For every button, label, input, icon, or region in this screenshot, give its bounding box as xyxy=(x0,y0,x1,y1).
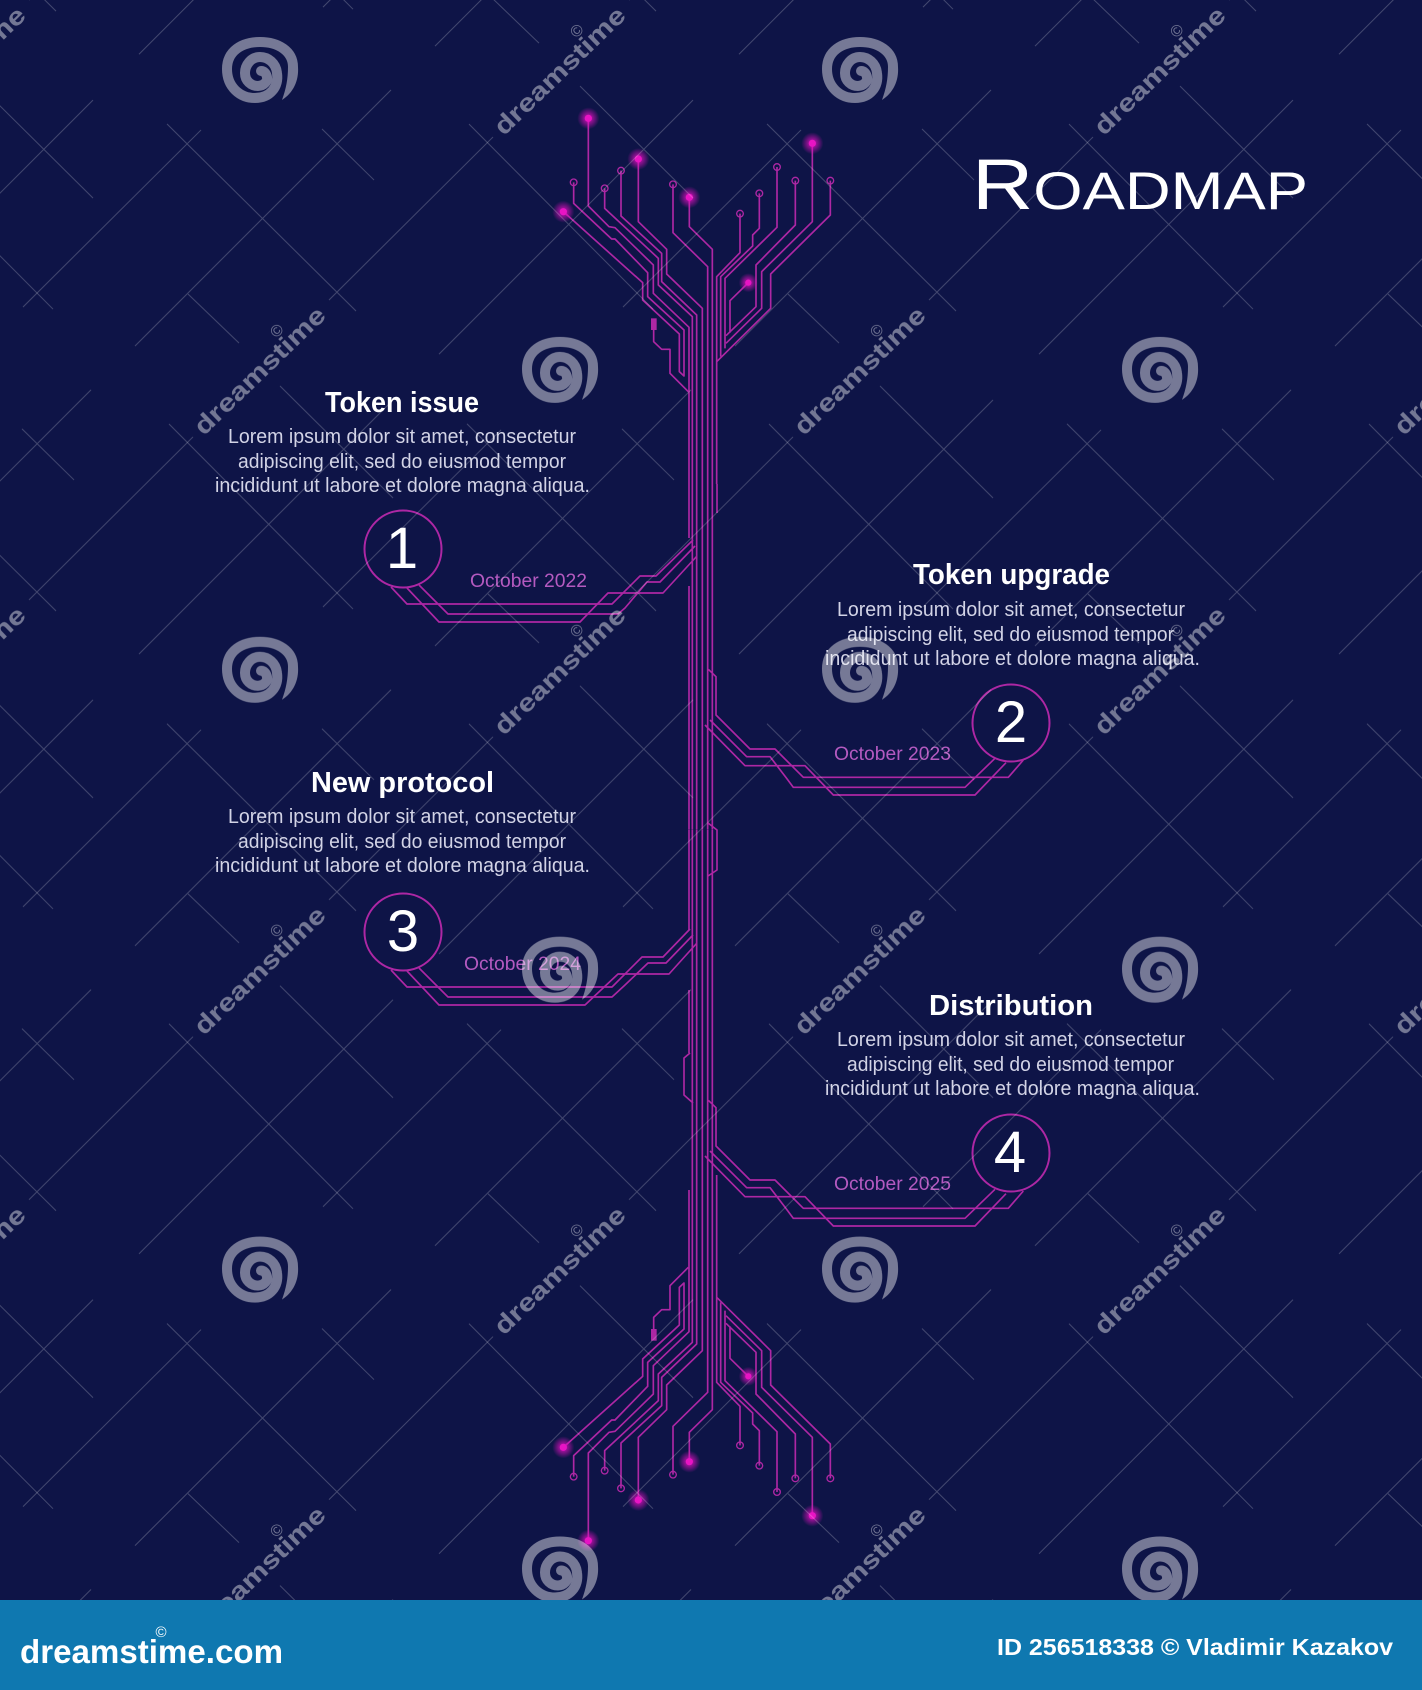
text block: new protocol description xyxy=(215,806,590,877)
panel: distribution xyxy=(825,990,1200,1195)
panel: new protocol xyxy=(215,767,590,975)
date: October 2024: October 2024 xyxy=(464,954,581,975)
heading: new protocol: New protocol xyxy=(311,767,494,799)
text block: token issue description: Lorem ipsum dolor sit amet, consectetur xyxy=(228,426,576,448)
circuit tree crown xyxy=(552,107,834,829)
heading: token issue: Token issue xyxy=(325,387,479,419)
step 3 connector xyxy=(391,929,697,1005)
footer credit: ID 256518338 © Vladimir Kazakov xyxy=(997,1634,1393,1660)
number badge 1: 1 xyxy=(386,516,418,581)
number badge 1 xyxy=(364,510,442,588)
number badge 2 xyxy=(972,684,1050,762)
footer logo text: © xyxy=(155,1624,167,1641)
panel: token issue xyxy=(215,387,590,592)
number badge 4: 4 xyxy=(994,1120,1026,1185)
circuit tree roots xyxy=(552,830,834,1552)
trunk gaps xyxy=(688,538,690,1190)
heading: distribution: Distribution xyxy=(929,990,1093,1022)
number badge 4 xyxy=(972,1114,1050,1192)
number badge 3 xyxy=(364,894,442,970)
trunk connectors xyxy=(684,484,717,1103)
step 4 connector xyxy=(705,1100,1023,1226)
text block: token upgrade description: incididunt ut labore et dolore magna aliqua. xyxy=(825,648,1200,670)
date: October 2023: October 2023 xyxy=(834,744,951,765)
text block: token issue description xyxy=(215,426,590,497)
heading: token upgrade: Token upgrade xyxy=(913,559,1110,591)
text block: token upgrade description: Lorem ipsum dolor sit amet, consectetur xyxy=(837,599,1185,621)
text block: new protocol description: incididunt ut labore et dolore magna aliqua. xyxy=(215,855,590,877)
step 2 connector xyxy=(705,669,1023,795)
panel: token upgrade xyxy=(825,559,1200,765)
text block: distribution description: adipiscing elit, sed do eiusmod tempor xyxy=(847,1054,1174,1076)
text block: token upgrade description: adipiscing elit, sed do eiusmod tempor xyxy=(847,624,1174,646)
date: October 2025: October 2025 xyxy=(834,1174,951,1195)
footer logo text: dreamstime.com xyxy=(20,1633,283,1670)
step 1 connector xyxy=(391,540,697,622)
text block: distribution description xyxy=(825,1029,1200,1100)
text block: new protocol description: adipiscing elit, sed do eiusmod tempor xyxy=(238,831,566,853)
date: October 2022: October 2022 xyxy=(470,571,587,592)
text block: new protocol description: Lorem ipsum dolor sit amet, consectetur xyxy=(228,806,576,828)
text block: token issue description: adipiscing elit, sed do eiusmod tempor xyxy=(238,451,566,473)
text block: distribution description: incididunt ut labore et dolore magna aliqua. xyxy=(825,1078,1200,1100)
title: ROADMAP xyxy=(972,146,1308,225)
footer bar xyxy=(0,1600,1422,1690)
text block: token upgrade description xyxy=(825,599,1200,670)
text block: distribution description: Lorem ipsum dolor sit amet, consectetur xyxy=(837,1029,1185,1051)
number badge 2: 2 xyxy=(995,690,1027,755)
text block: token issue description: incididunt ut labore et dolore magna aliqua. xyxy=(215,475,590,497)
number badge 3: 3 xyxy=(387,899,419,964)
